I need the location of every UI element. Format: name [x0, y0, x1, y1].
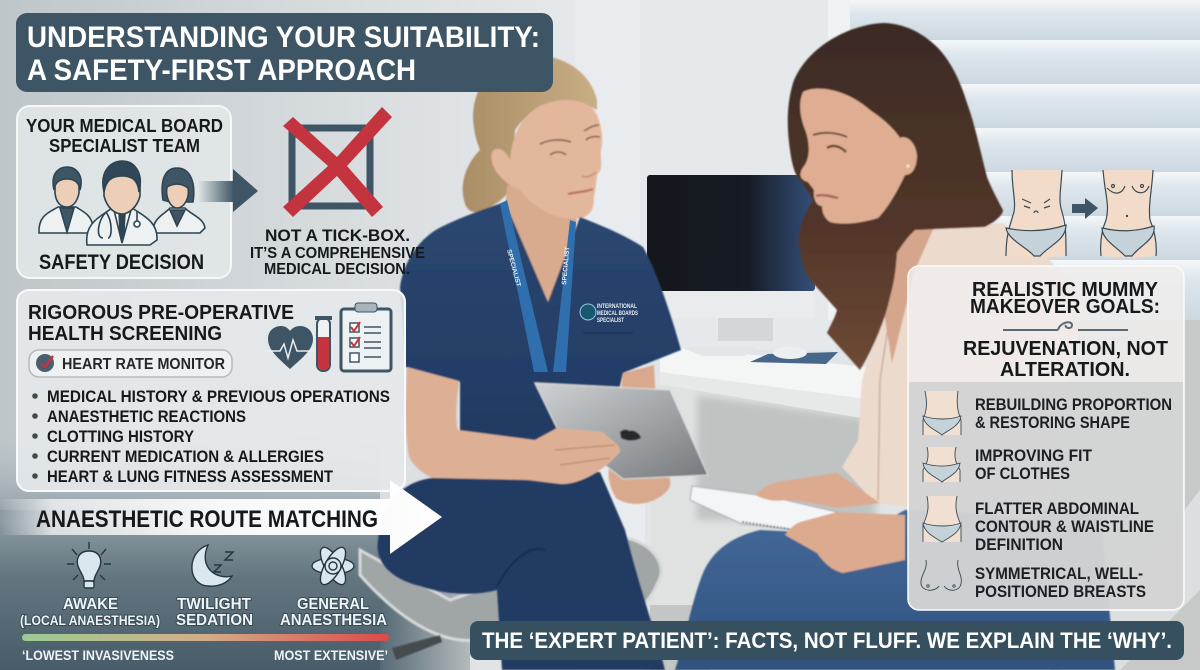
nurse neck	[505, 185, 580, 305]
photo: medical specialist in navy scrubs	[378, 55, 708, 670]
pill: heart rate monitor	[29, 350, 232, 377]
icon: waist torso	[923, 391, 961, 435]
desk with computer monitor	[647, 175, 875, 420]
title banner	[16, 13, 553, 92]
goal: abdominal contour: DEFINITION	[975, 535, 1063, 554]
notebook	[690, 486, 837, 531]
goal: clothes fit: OF CLOTHES	[975, 464, 1070, 483]
screening heading	[28, 302, 294, 345]
goals subheading	[963, 338, 1168, 381]
patient face	[800, 89, 917, 224]
icon: atom	[312, 544, 354, 588]
footer banner: expert patient: THE ‘EXPERT PATIENT’: FACTS, NOT FLUFF. WE EXPLAIN THE ‘WHY’.	[482, 628, 1172, 653]
goal: abdominal contour	[923, 496, 1154, 554]
footer banner: expert patient	[470, 621, 1184, 660]
patient jeans	[675, 510, 1115, 670]
nurse trousers	[378, 472, 665, 670]
chest logo	[580, 304, 638, 324]
icon: before torso	[1006, 170, 1066, 258]
patient hair	[788, 23, 1003, 370]
goals subheading: REJUVENATION, NOT	[963, 338, 1168, 360]
label: general anaesthesia	[280, 596, 387, 629]
team heading	[26, 116, 223, 156]
icon: breasts outline	[921, 560, 961, 590]
goal: breasts: POSITIONED BREASTS	[975, 582, 1146, 601]
goal: abdominal contour: FLATTER ABDOMINAL	[975, 499, 1139, 518]
goals heading	[970, 279, 1160, 318]
arrow: before to after	[1072, 198, 1098, 219]
icon: moon and zzz	[192, 545, 233, 586]
title banner: UNDERSTANDING YOUR SUITABILITY:	[27, 21, 540, 54]
screening checklist	[32, 387, 390, 486]
patient neck	[880, 215, 935, 363]
panel: medical board specialist team	[17, 106, 231, 278]
goal: proportion	[923, 391, 1172, 435]
arrow: team to decision	[198, 169, 258, 212]
label: twilight sedation: TWILIGHT	[177, 596, 251, 613]
patient hands	[755, 473, 880, 508]
label: awake local anaesthesia	[20, 596, 160, 628]
screening checklist: MEDICAL HISTORY & PREVIOUS OPERATIONS	[47, 387, 390, 406]
screening checklist: CLOTTING HISTORY	[47, 427, 195, 446]
goals heading: REALISTIC MUMMY	[972, 279, 1159, 301]
screening checklist: HEART & LUNG FITNESS ASSESSMENT	[47, 467, 334, 486]
goal: clothes fit	[923, 446, 1093, 483]
screening heading: RIGOROUS PRE-OPERATIVE	[28, 302, 294, 324]
icon: test tube	[315, 316, 332, 371]
nurse left forearm and hand	[406, 367, 620, 484]
goals heading: MAKEOVER GOALS:	[970, 296, 1160, 318]
photo: chair	[360, 538, 661, 660]
nurse face	[491, 100, 602, 219]
label: awake local anaesthesia: (LOCAL ANAESTHESIA)	[20, 612, 160, 628]
invasiveness scale: MOST EXTENSIVE’	[274, 647, 388, 663]
text: not a tick-box: NOT A TICK-BOX.	[265, 226, 410, 245]
goal: abdominal contour: CONTOUR & WAISTLINE	[975, 517, 1154, 536]
panel: realistic goals	[908, 266, 1184, 610]
icon: hips torso	[923, 447, 960, 482]
arrow banner: anaesthetic route matching	[0, 480, 442, 554]
text: not a tick-box: MEDICAL DECISION.	[264, 261, 410, 278]
icon: crossed-out tick box	[283, 107, 392, 217]
invasiveness scale: ‘LOWEST INVASIVENESS	[22, 647, 174, 663]
screening heading: HEALTH SCREENING	[28, 323, 222, 345]
pill: heart rate monitor: HEART RATE MONITOR	[62, 356, 225, 373]
goals subheading: ALTERATION.	[1000, 359, 1130, 381]
team heading: SPECIALIST TEAM	[49, 136, 200, 156]
screening checklist: ANAESTHETIC REACTIONS	[47, 407, 246, 426]
title banner: A SAFETY-FIRST APPROACH	[27, 54, 416, 87]
patient facial features	[813, 133, 847, 198]
nurse facial features	[540, 125, 600, 194]
tablet	[535, 383, 708, 479]
label: general anaesthesia: GENERAL	[297, 596, 369, 613]
arrow banner: anaesthetic route matching: ANAESTHETIC ROUTE MATCHING	[36, 506, 378, 533]
ornament divider	[1003, 322, 1128, 330]
screening checklist: CURRENT MEDICATION & ALLERGIES	[47, 447, 324, 466]
chest logo: INTERNATIONAL	[597, 304, 637, 310]
nurse right forearm and hand	[609, 365, 670, 504]
icon: abdomen torso	[923, 496, 961, 542]
icon: light bulb	[67, 542, 111, 588]
nurse scrub top	[400, 202, 681, 470]
label: twilight sedation: SEDATION	[176, 612, 253, 629]
icon: heart rate	[264, 326, 316, 369]
safety decision label: SAFETY DECISION	[39, 251, 204, 274]
chest logo: SPECIALIST	[597, 318, 624, 324]
goal: clothes fit: IMPROVING FIT	[975, 446, 1093, 465]
icon: three doctors	[39, 161, 205, 245]
chest logo: MEDICAL BOARDS	[597, 311, 638, 317]
invasiveness scale	[22, 634, 389, 663]
goal: proportion: REBUILDING PROPORTION	[975, 395, 1172, 414]
lanyard with badge text	[500, 200, 576, 372]
label: awake local anaesthesia: AWAKE	[63, 596, 118, 613]
lanyard with badge text: SPECIALIST	[505, 249, 522, 288]
goal: breasts: SYMMETRICAL, WELL-	[975, 564, 1143, 583]
text: not a tick-box: IT’S A COMPREHENSIVE	[250, 245, 425, 262]
goal: proportion: & RESTORING SHAPE	[975, 413, 1130, 432]
label: twilight sedation	[176, 596, 253, 629]
goal: breasts	[921, 560, 1146, 601]
patient blouse	[842, 223, 1085, 520]
team heading: YOUR MEDICAL BOARD	[26, 116, 223, 136]
text: not a tick-box	[250, 226, 425, 278]
icon: clipboard checklist	[341, 303, 391, 371]
nurse hair	[463, 55, 597, 212]
icon: after torso	[1101, 170, 1156, 258]
photo: patient with dark hair	[675, 23, 1115, 670]
lanyard with badge text: SPECIALIST	[561, 246, 571, 285]
label: general anaesthesia: ANAESTHESIA	[280, 612, 387, 629]
panel: health screening	[17, 290, 405, 491]
